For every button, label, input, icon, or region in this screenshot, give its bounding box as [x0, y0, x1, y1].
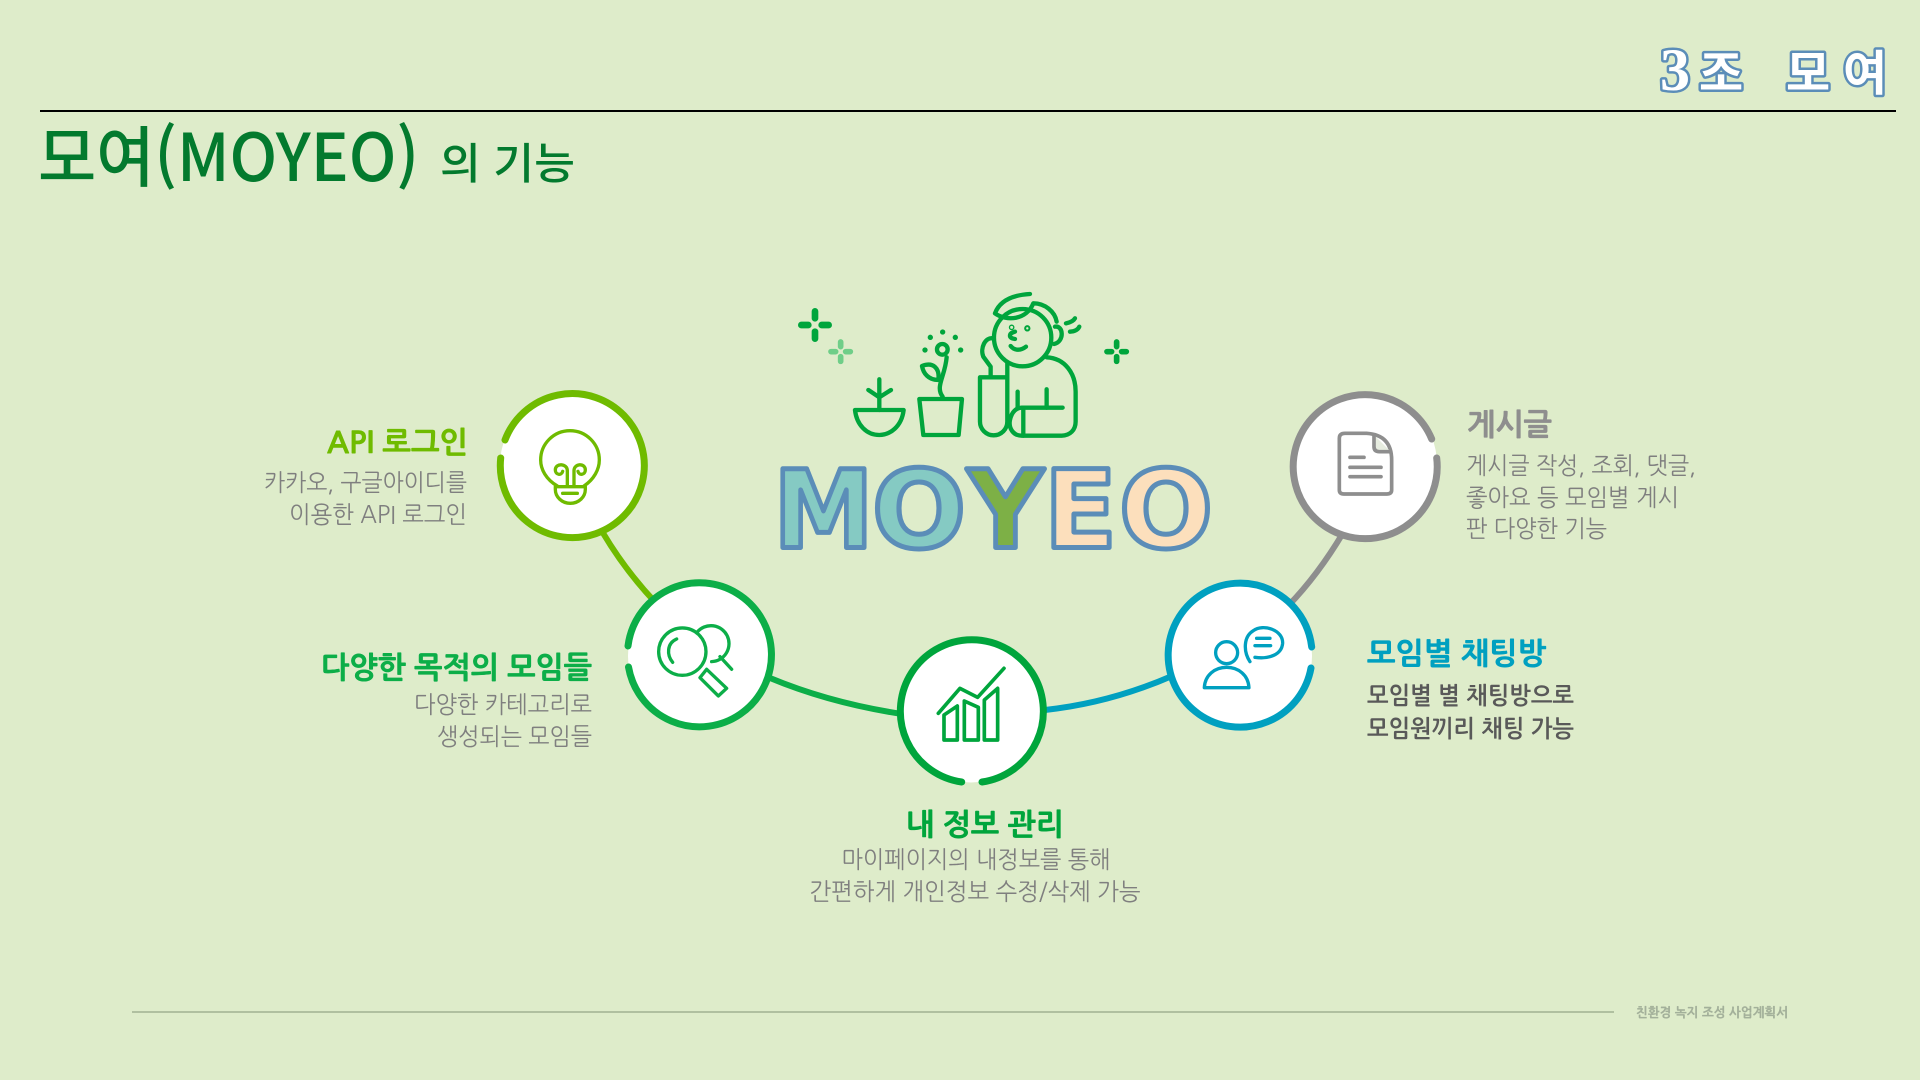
label: groups: 생성되는 모임들	[437, 725, 592, 749]
icon: growth chart	[938, 668, 1004, 740]
footer text: 친환경 녹지 조성 사업계획서	[1636, 1005, 1788, 1019]
node: chat	[1168, 583, 1312, 728]
label: chat: 모임별 별 채팅방으로	[1367, 683, 1574, 708]
logo: MOYEO	[774, 448, 1213, 574]
connector: chat to board	[1288, 533, 1343, 606]
connector: groups to profile	[770, 678, 902, 714]
label: profile: 간편하게 개인정보 수정/삭제 가능	[810, 880, 1140, 904]
label: groups	[321, 652, 592, 749]
logo: MOYEO: O	[872, 448, 966, 574]
connector: login to groups	[603, 533, 655, 602]
team label	[1660, 34, 1887, 104]
title: 의 기능	[440, 130, 575, 192]
label: API login: 카카오, 구글아이디를	[264, 471, 467, 495]
icon: thinking person	[980, 294, 1079, 436]
node: groups	[628, 583, 772, 728]
icon: person with speech bubble	[1204, 628, 1283, 688]
label: chat: 모임별 채팅방	[1367, 638, 1546, 669]
icon: sparkle small	[1107, 342, 1126, 361]
icon: sparkle large	[801, 311, 829, 339]
title: 모여(MOYEO)	[38, 105, 419, 201]
label: chat	[1367, 638, 1574, 741]
icon: document	[1339, 433, 1392, 494]
node: API login	[500, 393, 644, 538]
icon: light bulb	[541, 431, 599, 503]
label: board: 게시글	[1467, 409, 1552, 440]
logo: MOYEO: E	[1044, 448, 1117, 574]
icon: potted flower	[919, 329, 963, 435]
team label: 조	[1699, 34, 1743, 104]
label: groups: 다양한 카테고리로	[414, 693, 592, 717]
label: board: 판 다양한 기능	[1466, 517, 1607, 541]
team label: 3	[1660, 37, 1690, 103]
label: profile: 내 정보 관리	[906, 809, 1064, 840]
icon: magnifier	[659, 626, 732, 696]
label: profile: 마이페이지의 내정보를 통해	[842, 848, 1110, 872]
label: board	[1466, 409, 1696, 541]
connector: profile to chat	[1045, 676, 1172, 710]
icon: bowl plant	[855, 379, 904, 435]
label: chat: 모임원끼리 채팅 가능	[1367, 716, 1574, 741]
node: profile	[900, 640, 1043, 782]
illustration: person with plants	[801, 294, 1126, 436]
icon: sparkle light	[831, 342, 850, 361]
label: board: 게시글 작성, 조회, 댓글,	[1466, 454, 1696, 478]
logo: MOYEO: M	[774, 448, 874, 574]
node: board	[1293, 392, 1437, 539]
team label: 모	[1786, 34, 1830, 104]
team label: 여	[1843, 34, 1887, 104]
label: groups: 다양한 목적의 모임들	[321, 652, 592, 683]
label: API login: API 로그인	[327, 427, 468, 458]
label: profile	[810, 809, 1140, 904]
label: API login	[264, 427, 468, 527]
label: API login: 이용한 API 로그인	[289, 503, 467, 527]
label: board: 좋아요 등 모임별 게시	[1466, 486, 1679, 510]
logo: MOYEO: Y	[966, 448, 1045, 574]
logo: MOYEO: O	[1119, 448, 1213, 574]
